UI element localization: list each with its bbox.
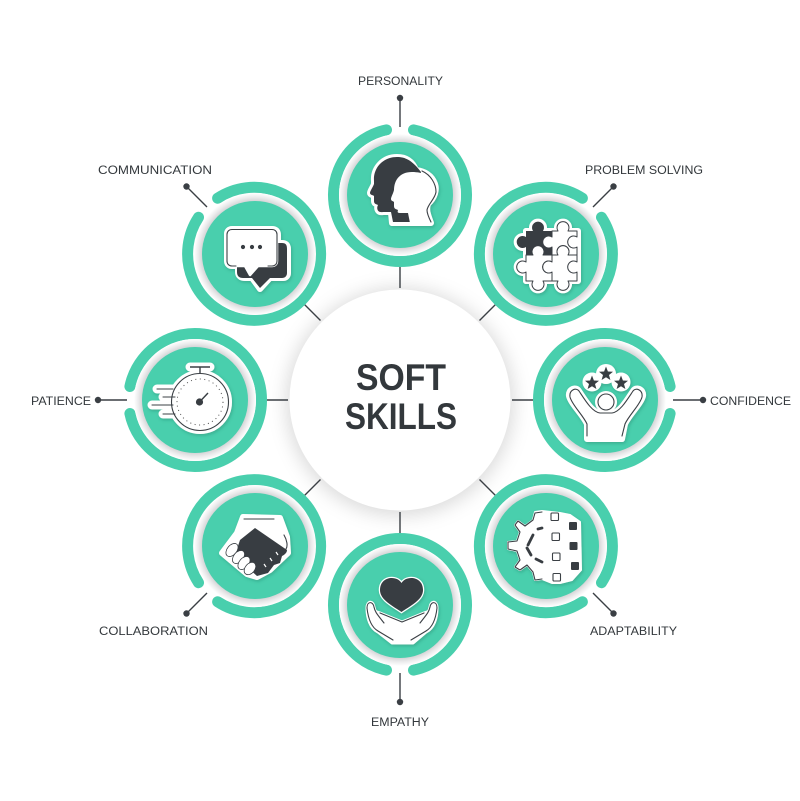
title — [345, 357, 457, 437]
icon: heart in hands — [367, 578, 437, 643]
connector: collaboration — [183, 480, 320, 617]
label: adaptability: ADAPTABILITY — [590, 624, 677, 638]
panel: adaptability — [452, 452, 639, 639]
label: personality: PERSONALITY — [358, 74, 443, 88]
label: problem solving: PROBLEM SOLVING — [585, 163, 703, 177]
label: patience: PATIENCE — [31, 394, 91, 408]
center circle: soft skills — [286, 288, 514, 516]
icon: handshake — [222, 517, 288, 577]
connector: patience — [95, 397, 288, 403]
disc: confidence — [544, 339, 666, 461]
disc: empathy — [339, 544, 461, 666]
icon: puzzle pieces — [517, 222, 578, 290]
connector: empathy — [397, 512, 403, 705]
panel: collaboration — [161, 452, 348, 639]
panel: empathy — [334, 512, 467, 705]
connector: problem solving — [480, 183, 617, 320]
connector: adaptability — [480, 480, 617, 617]
disc: problem solving — [485, 193, 607, 315]
label: confidence: CONFIDENCE — [710, 394, 791, 408]
panel: patience — [95, 334, 288, 467]
disc: adaptability — [485, 485, 607, 607]
ring: empathy — [334, 538, 467, 670]
icon: stopwatch — [152, 367, 229, 431]
disc: personality — [339, 134, 461, 256]
icon: person with stars — [569, 364, 643, 439]
icon: speech bubbles — [227, 229, 288, 289]
panel: personality — [333, 95, 466, 288]
connector: communication — [183, 183, 320, 320]
panel: communication — [161, 161, 348, 348]
connector: confidence — [512, 397, 706, 403]
ring: confidence — [538, 333, 670, 466]
label: empathy: EMPATHY — [371, 715, 429, 729]
ring: collaboration — [161, 452, 348, 639]
ring: communication — [161, 161, 348, 348]
icon: two head profiles — [370, 157, 436, 223]
ring: patience — [130, 334, 262, 467]
label: communication: COMMUNICATION — [98, 163, 212, 177]
panel: problem solving — [452, 161, 639, 348]
panel: confidence — [512, 333, 706, 466]
title: SKILLS — [345, 396, 457, 437]
connector: personality — [397, 95, 403, 288]
ring: personality — [333, 130, 466, 262]
ring: problem solving — [452, 161, 639, 348]
ring: adaptability — [452, 452, 639, 639]
disc: patience — [134, 339, 256, 461]
icon: gear with squares — [508, 511, 581, 583]
title: SOFT — [356, 357, 446, 398]
disc: collaboration — [194, 485, 316, 607]
label: collaboration: COLLABORATION — [99, 624, 208, 638]
disc: communication — [194, 193, 316, 315]
